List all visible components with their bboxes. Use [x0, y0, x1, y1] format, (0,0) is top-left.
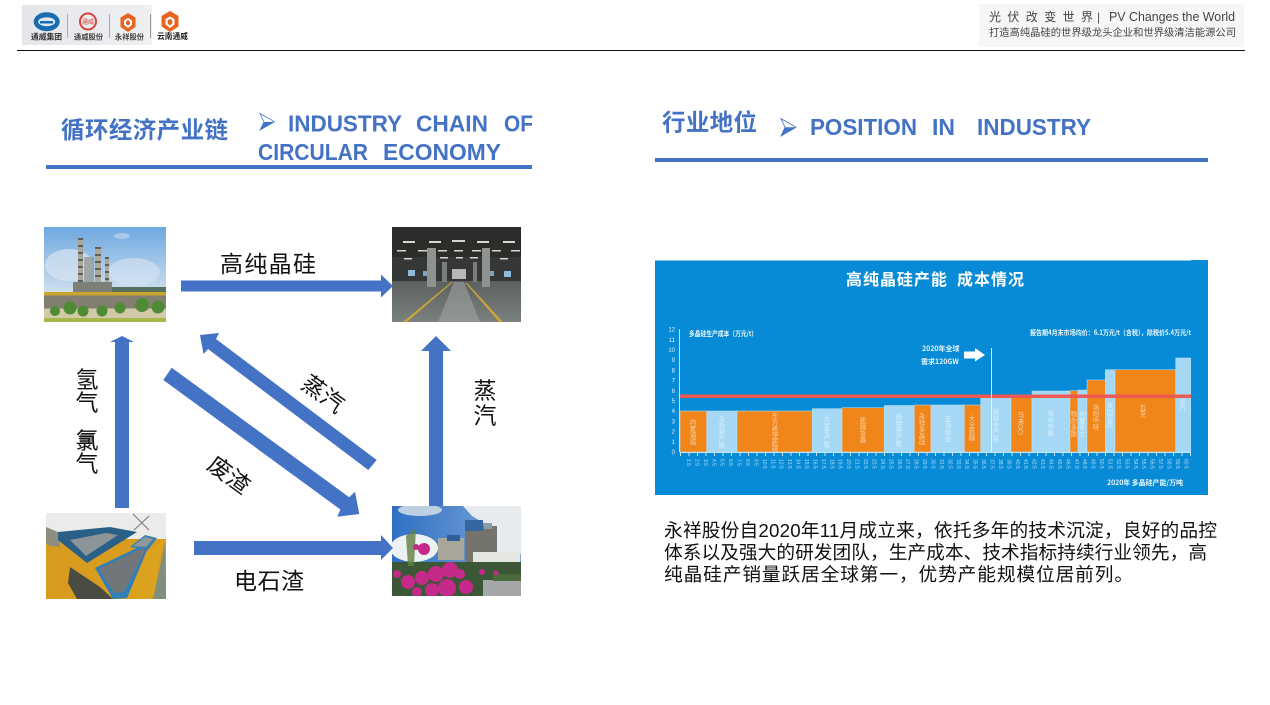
label: steam right: [474, 371, 496, 430]
x axis: [680, 452, 1191, 469]
label: hydrogen: 氢: [76, 360, 98, 394]
heading: circular economy chain: ECONOMY: [383, 139, 501, 165]
x axis: 30.5: [930, 459, 936, 469]
text block: industry position description: 体系以及强大的研发团队，生产成本、技术指标持续行业领先，高: [664, 542, 1207, 563]
header slogan: 光伏改变世界: [989, 8, 1093, 25]
text block: industry position description: [664, 520, 1217, 585]
photo: chemical plant towers: [44, 227, 166, 322]
x axis: 37.5: [988, 459, 994, 469]
bar labels: REC: [1178, 399, 1188, 411]
x axis: 24.5: [879, 459, 885, 469]
arrow: carbide slag: [194, 535, 393, 560]
x axis: 40.5: [1014, 459, 1020, 469]
x axis: 22.5: [862, 459, 868, 469]
arrow: high purity silicon: [181, 274, 393, 298]
bar labels: 新疆协鑫: [858, 416, 868, 444]
logo: Tongwei Co: [74, 14, 104, 42]
bar labels: 美国瓦克: [1105, 401, 1115, 429]
y axis: 3: [672, 419, 676, 425]
y axis: 9: [672, 358, 676, 364]
heading: position in industry: [662, 104, 1091, 140]
y axis: 4: [672, 409, 676, 415]
heading: position in industry: POSITION: [810, 114, 917, 140]
label: high purity silicon: 高纯晶硅: [220, 245, 316, 279]
header slogan: [979, 4, 1244, 47]
x axis: 14.5: [795, 459, 801, 469]
logo: Tongwei Group: 通威集团: [31, 32, 62, 42]
logo: Tongwei Co: 通威: [82, 17, 94, 26]
bar labels: 新特新产能: [894, 412, 904, 447]
heading: circular economy chain: [61, 110, 533, 165]
x axis: 8.5: [744, 459, 750, 466]
bar labels: 永祥多晶硅: [917, 411, 927, 445]
x axis: 2.5: [693, 459, 699, 466]
x axis: 49.5: [1090, 459, 1096, 469]
heading: position in industry: INDUSTRY: [977, 114, 1091, 140]
label: hydrogen: 气: [76, 383, 98, 417]
bar labels: 洛阳中硅: [1091, 403, 1101, 430]
x axis: 51.5: [1106, 459, 1112, 469]
x axis: 3.5: [702, 459, 708, 466]
label: hydrogen: [76, 360, 98, 417]
bar labels: 亚洲硅业: [943, 416, 953, 442]
x axis: 50.5: [1098, 459, 1104, 469]
label: steam right: 汽: [474, 396, 496, 430]
arrow: waste residue diagonal: [163, 368, 359, 517]
x axis: 21.5: [854, 459, 860, 469]
y axis: [668, 328, 680, 456]
y axis: 12: [668, 328, 676, 334]
x axis: 29.5: [921, 459, 927, 469]
bar labels: 新特老产能: [991, 407, 1001, 442]
label: waste residue: 废渣: [202, 446, 259, 501]
label: chlorine: [76, 421, 98, 478]
heading: circular economy chain: CIRCULAR: [258, 139, 368, 165]
x axis: 52.5: [1115, 459, 1121, 469]
chart axis captions: 报告期4月末市场均价：6.1万元/t（含税），除税价5.4万元/t: [1030, 328, 1191, 338]
y axis: 6: [672, 389, 676, 395]
x axis: 41.5: [1022, 459, 1028, 469]
x axis: 31.5: [938, 459, 944, 469]
bar labels: 永祥新产能: [717, 414, 727, 449]
x axis: 58.5: [1166, 459, 1172, 469]
y axis: 7: [672, 379, 676, 385]
x axis: 47.5: [1073, 459, 1079, 469]
heading: circular economy chain: 循环经济产业链: [61, 111, 228, 145]
x axis: 18.5: [828, 459, 834, 469]
x axis: 35.5: [972, 459, 978, 469]
x axis: 27.5: [904, 459, 910, 469]
logo: Yongxiang: 永祥股份: [115, 32, 145, 42]
x axis: 7.5: [736, 459, 742, 466]
photo: plant with flowers: [392, 506, 521, 596]
x axis: 33.5: [955, 459, 961, 469]
header slogan: 打造高纯晶硅的世界级龙头企业和世界级清洁能源公司: [989, 24, 1236, 39]
x axis: 16.5: [812, 459, 818, 469]
demand marker: 2020年全球: [922, 344, 960, 354]
x axis: 17.5: [820, 459, 826, 469]
bars: [680, 358, 1191, 452]
demand marker: 需求120GW: [921, 357, 959, 367]
label: carbide slag: 电石渣: [234, 562, 304, 596]
heading: position in industry: IN: [932, 114, 955, 140]
chart axis captions: [689, 328, 1191, 488]
bar labels: 鄂尔多斯: [1069, 410, 1079, 438]
y axis: 0: [672, 450, 676, 456]
label: steam diagonal: 蒸汽: [296, 365, 353, 420]
demand marker: [921, 344, 992, 452]
logo: Yunnan Tongwei: [157, 11, 188, 42]
heading: circular economy chain: OF: [504, 110, 533, 136]
bar labels: [688, 399, 1188, 453]
arrow: hydrogen and chlorine up: [110, 336, 134, 508]
x axis: 10.5: [761, 459, 767, 469]
x axis: 54.5: [1132, 459, 1138, 469]
bar labels: 徐州中能: [1046, 409, 1056, 437]
x axis: 36.5: [980, 459, 986, 469]
panel: capacity and cost chart: [655, 260, 1208, 495]
logo: Yunnan Tongwei: 云南通威: [157, 31, 188, 42]
logo: Yongxiang: [115, 13, 145, 42]
x axis: 38.5: [997, 459, 1003, 469]
bar labels: 瓦克: [1138, 404, 1148, 419]
x axis: 59.5: [1174, 459, 1180, 469]
y axis: 8: [672, 368, 676, 374]
price line: [680, 394, 1191, 398]
icon: heading arrow bullet: [260, 114, 274, 130]
y axis: 5: [672, 399, 676, 405]
text block: industry position description: 永祥股份自2020年11月成立来，依托多年的技术沉淀，良好的品控: [664, 520, 1217, 541]
header logo strip: [22, 3, 190, 45]
logo: Tongwei Co: 通威股份: [74, 32, 104, 42]
logo: Tongwei Group: [31, 12, 62, 42]
x axis: 25.5: [887, 459, 893, 469]
chart axis captions: 多晶硅生产成本（万元/t）: [689, 329, 757, 339]
label: steam right: 蒸: [474, 371, 496, 405]
photo: workshop with racks: [46, 513, 166, 599]
x axis: 44.5: [1048, 459, 1054, 469]
y axis: 10: [668, 348, 676, 354]
x axis: 45.5: [1056, 459, 1062, 469]
x axis: 19.5: [837, 459, 843, 469]
x axis: 43.5: [1039, 459, 1045, 469]
icon: heading arrow bullet: [781, 119, 796, 136]
photo: factory hall: [392, 227, 521, 322]
x axis: 6.5: [727, 459, 733, 466]
x axis: 5.5: [719, 459, 725, 466]
header slogan: PV Changes the World: [1109, 10, 1235, 24]
x axis: 42.5: [1031, 459, 1037, 469]
bar labels: 大全新疆: [967, 414, 977, 442]
x axis: 20.5: [845, 459, 851, 469]
heading: circular economy chain: INDUSTRY: [288, 110, 402, 136]
x axis: 12.5: [778, 459, 784, 469]
x axis: 9.5: [752, 459, 758, 466]
x axis: 11.5: [769, 459, 775, 469]
label: chlorine: 气: [76, 444, 98, 478]
chart axis captions: 2020年 多晶硅产能/万吨: [1107, 478, 1183, 488]
y axis: 1: [672, 440, 676, 446]
x axis: 13.5: [786, 459, 792, 469]
x axis: 53.5: [1123, 459, 1129, 469]
x axis: 55.5: [1140, 459, 1146, 469]
heading: circular economy chain: CHAIN: [416, 110, 488, 136]
x axis: 34.5: [963, 459, 969, 469]
x axis: 1.5: [685, 459, 691, 466]
arrow: steam diagonal: [200, 333, 377, 470]
x axis: 57.5: [1157, 459, 1163, 469]
label: chlorine: 氯: [76, 421, 98, 455]
y axis: 2: [672, 430, 676, 436]
x axis: 56.5: [1149, 459, 1155, 469]
arrow: steam up right: [421, 336, 451, 506]
heading: position in industry: 行业地位: [662, 104, 757, 138]
x axis: 46.5: [1064, 459, 1070, 469]
x axis: 28.5: [913, 459, 919, 469]
header slogan: |: [1097, 10, 1100, 24]
x axis: 48.5: [1081, 459, 1087, 469]
text block: industry position description: 纯晶硅产销量跃居全球第一，优势产能规模位居前列。: [664, 564, 1133, 585]
bar labels: 内蒙通威: [688, 418, 698, 446]
chart title: 高纯晶硅产能 成本情况: [846, 266, 1024, 290]
bar labels: 大全老产能: [822, 413, 832, 448]
x axis: 23.5: [870, 459, 876, 469]
x axis: 4.5: [710, 459, 716, 466]
x axis: 26.5: [896, 459, 902, 469]
x axis: 15.5: [803, 459, 809, 469]
bar labels: 东方希望新疆: [770, 411, 780, 453]
x axis: 60.5: [1182, 459, 1188, 469]
bar labels: 马来OCI: [1016, 411, 1026, 435]
bar labels: 内蒙东立: [1078, 410, 1088, 437]
x axis: 32.5: [946, 459, 952, 469]
x axis: 39.5: [1005, 459, 1011, 469]
y axis: 11: [669, 338, 676, 344]
